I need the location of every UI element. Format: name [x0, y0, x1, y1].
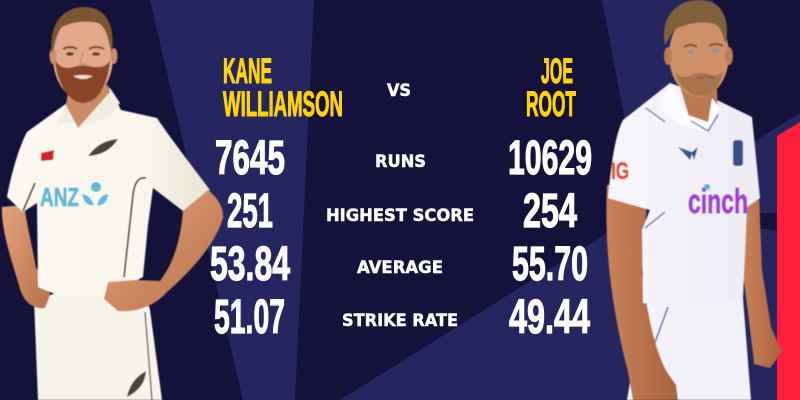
nose — [80, 52, 87, 64]
left diagonal band — [150, 0, 314, 400]
stat row: highest score: HIGHEST SCORE — [326, 206, 474, 226]
sponsor: IG: IG — [611, 158, 629, 185]
heading: Kane Williamson — [223, 52, 343, 124]
shirt piping — [23, 178, 146, 277]
neck — [678, 80, 718, 133]
mouth — [697, 77, 714, 78]
dark wedge — [740, 213, 777, 231]
Canterbury badge — [41, 150, 54, 161]
shirt — [608, 83, 760, 308]
top right band — [602, 0, 720, 200]
silver fern badge — [88, 139, 118, 156]
stat row: average — [210, 238, 588, 291]
heading: Kane Williamson: WILLIAMSON — [223, 85, 343, 124]
ears — [664, 47, 672, 65]
stat row: runs: 7645 — [215, 132, 285, 185]
stat row: strike rate: 49.44 — [509, 291, 590, 344]
stat row: highest score: 254 — [523, 185, 577, 238]
vs label: VS — [387, 81, 411, 101]
bottom right triangle — [340, 113, 800, 400]
stat row: average: AVERAGE — [357, 258, 443, 278]
stat row: average: 55.70 — [512, 238, 588, 291]
stat row: runs: 10629 — [508, 132, 592, 185]
face — [53, 14, 113, 100]
trousers — [34, 285, 162, 400]
stat row: strike rate — [214, 291, 590, 344]
hair — [664, 0, 727, 45]
England crest — [733, 140, 743, 166]
trousers — [627, 298, 751, 400]
right arm — [104, 190, 223, 311]
stat row: runs: RUNS — [375, 152, 426, 172]
left arm — [606, 185, 678, 400]
Castore badge — [678, 147, 698, 160]
mouth — [73, 75, 93, 79]
fern on trousers — [127, 371, 146, 397]
stat row: strike rate: 51.07 — [214, 291, 285, 344]
stat row: highest score — [227, 185, 577, 238]
stubble — [675, 72, 723, 96]
sponsor: ANZ: ANZ — [40, 182, 79, 212]
infographic: JOE — [541, 52, 573, 91]
sleeve piping — [645, 212, 665, 228]
beard — [55, 60, 110, 103]
collar piping — [646, 108, 718, 131]
stat row: strike rate: STRIKE RATE — [342, 311, 458, 331]
heading: Joe Root — [526, 52, 576, 124]
face — [669, 13, 729, 97]
left arm — [2, 205, 50, 308]
right arm — [743, 195, 782, 368]
eyes — [684, 44, 723, 54]
heading: Kane Williamson: KANE — [223, 52, 272, 91]
ears — [50, 48, 56, 64]
sponsor: cinch — [688, 183, 748, 221]
sponsor: cinch: cinch — [688, 183, 748, 221]
red stripe — [777, 122, 800, 400]
stat row: average: 53.84 — [210, 238, 290, 291]
stat row: runs — [215, 132, 592, 185]
shirt — [7, 88, 210, 297]
player photo: Kane Williamson — [2, 7, 223, 400]
collar — [660, 83, 720, 133]
hair — [51, 7, 113, 54]
collar — [56, 88, 120, 128]
infographic: ROOT — [526, 85, 576, 124]
neck — [66, 85, 110, 128]
stat row: highest score: 251 — [227, 185, 273, 238]
eyes — [63, 47, 104, 56]
player photo: Joe Root — [606, 0, 782, 400]
